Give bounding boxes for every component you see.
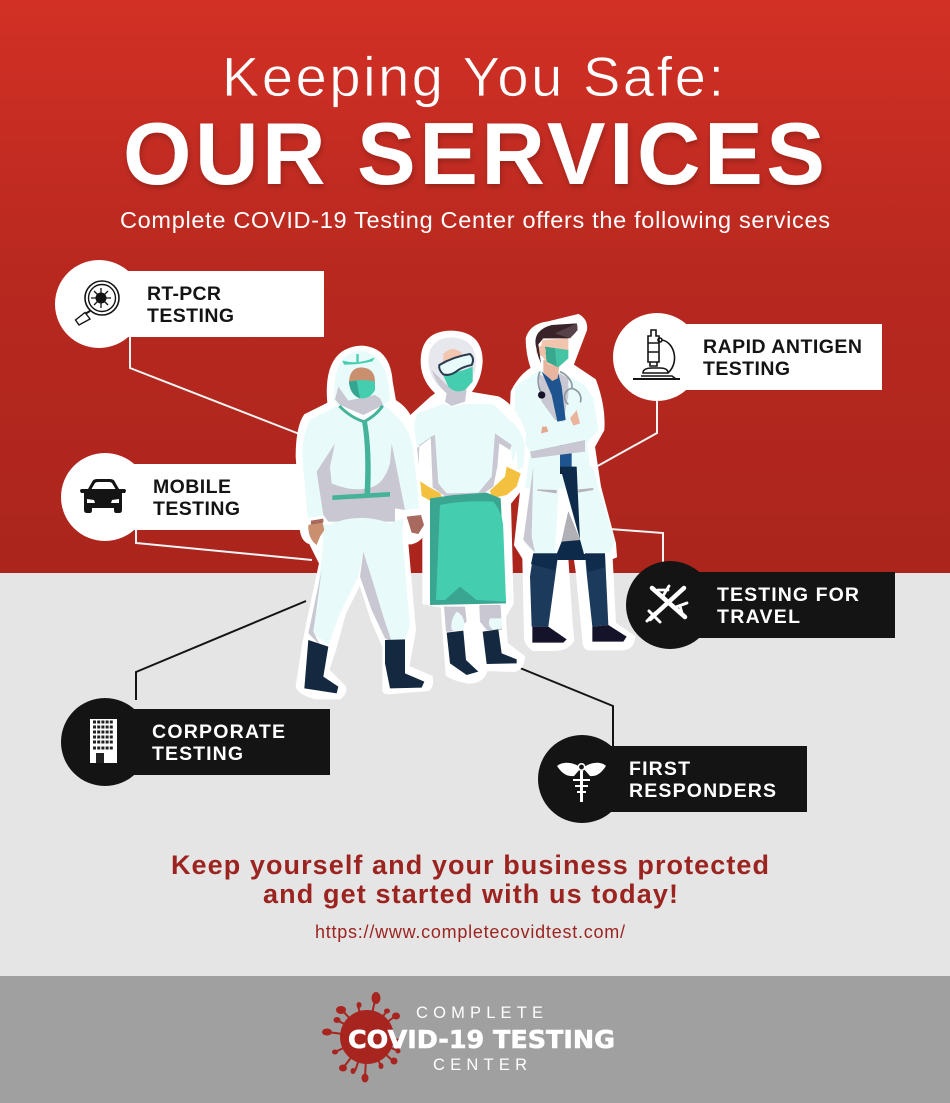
callout: corporate testing (61, 698, 330, 786)
icon: car (80, 479, 126, 513)
callout: first responders: FIRST (629, 758, 690, 780)
callout: rapid antigen testing: TESTING (703, 358, 790, 380)
website url: https://www.completecovidtest.com/ (315, 922, 625, 942)
illustration: three medical workers (297, 315, 634, 698)
callout: rapid antigen testing: RAPID ANTIGEN (703, 336, 862, 358)
icon: building (90, 719, 117, 763)
callout: testing for travel (626, 561, 895, 649)
callout: mobile testing: TESTING (153, 498, 240, 520)
red upper background (0, 0, 950, 573)
callout: rt-pcr testing: TESTING (147, 305, 234, 327)
callout: mobile testing (61, 453, 305, 541)
connector lines (130, 335, 663, 748)
figure: nurse with apron (410, 332, 525, 683)
icon: magnifier with virus (76, 281, 119, 325)
callout: first responders: RESPONDERS (629, 780, 776, 802)
closing message line two: and get started with us today! (263, 879, 678, 909)
grey lower background (0, 573, 950, 976)
callout: testing for travel: TESTING FOR (717, 584, 859, 606)
callout: corporate testing: TESTING (152, 743, 243, 765)
callout: corporate testing: CORPORATE (152, 721, 285, 743)
figure: doctor (510, 315, 634, 650)
icon: microscope (633, 330, 680, 379)
icon: caduceus (557, 763, 606, 802)
icon: crossed planes (647, 586, 687, 622)
logo: COVID-19 TESTING (348, 1025, 615, 1054)
logo (322, 992, 615, 1082)
logo: CENTER (433, 1056, 527, 1074)
callout: testing for travel: TRAVEL (717, 606, 800, 628)
callout: first responders (538, 735, 807, 823)
logo: COMPLETE (416, 1004, 543, 1022)
title: keeping you safe: Keeping You Safe: (222, 45, 724, 108)
footer band (0, 976, 950, 1103)
figure: worker in protective suit (297, 347, 432, 698)
callout: rapid antigen testing (613, 313, 882, 401)
closing message: Keep yourself and your business protected (171, 850, 769, 880)
subtitle: Complete COVID-19 Testing Center offers the following services (120, 207, 830, 233)
title: our services: OUR SERVICES (123, 104, 825, 203)
callout: rt-pcr testing: RT-PCR (147, 283, 221, 305)
icon: virus (322, 992, 402, 1082)
callout: mobile testing: MOBILE (153, 476, 231, 498)
callout: rt-pcr testing (55, 260, 324, 348)
